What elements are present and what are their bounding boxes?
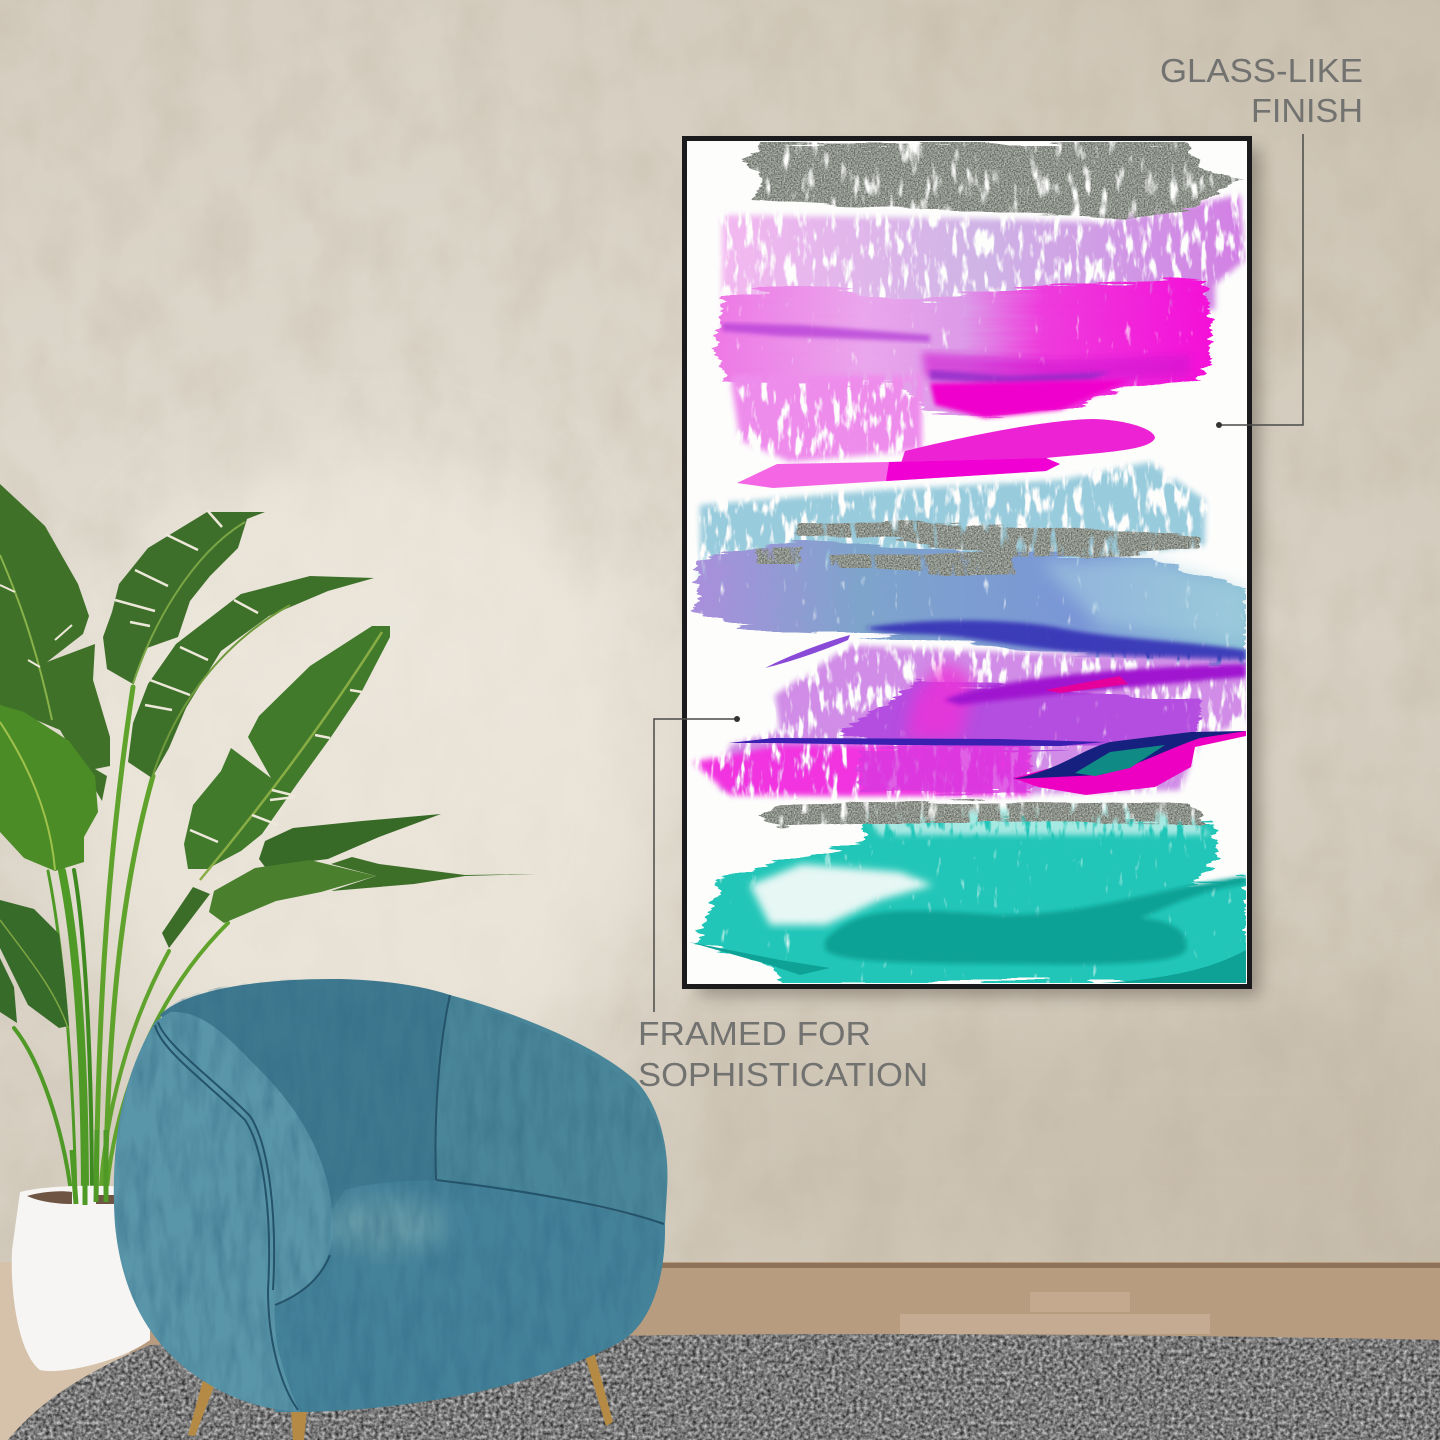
leaf: lower left of fan — [162, 887, 210, 948]
chair back right section — [435, 995, 668, 1224]
leaf: bottom left — [0, 900, 69, 1028]
magenta lower stroke — [693, 731, 1246, 796]
armchair — [114, 979, 668, 1440]
leaf: front fan blade — [209, 860, 376, 923]
pale purple wash — [722, 195, 1245, 310]
seat highlight — [325, 1200, 445, 1250]
leaf: upper fan blade — [259, 814, 441, 867]
pale magenta drips — [730, 375, 922, 462]
callout: framed for sophistication: SOPHISTICATION — [638, 1056, 928, 1093]
leader line — [1220, 134, 1303, 425]
velvet texture — [114, 979, 666, 1412]
framed painting — [684, 138, 1250, 986]
gold legs — [188, 1344, 613, 1440]
grey mid streaks — [755, 522, 1200, 575]
leaf: front broad left — [0, 705, 98, 871]
leaf: far left tall — [0, 484, 110, 801]
callout: glass-like finish — [1160, 52, 1363, 428]
leaf: upper centre — [103, 510, 265, 684]
leader line — [654, 719, 736, 1012]
wooden floor — [0, 1262, 1440, 1440]
black frame and white canvas — [684, 138, 1250, 986]
pink purple wash — [720, 645, 1246, 795]
small purple drip — [765, 635, 850, 668]
abstract brush strokes — [689, 144, 1246, 983]
chair back — [160, 979, 450, 1240]
grey shag rug — [8, 1334, 1440, 1440]
painting drop shadow — [698, 148, 1260, 996]
blue purple wash — [696, 540, 1246, 665]
plant — [0, 484, 538, 1205]
white planter pot — [12, 1130, 150, 1371]
magenta sliver strokes — [737, 419, 1155, 488]
grey lower band — [758, 801, 1207, 827]
callout label: FRAMED FOR — [638, 1015, 871, 1052]
leaf: lowest left — [0, 958, 17, 1023]
leaf: large right — [184, 626, 390, 880]
left arm — [114, 1012, 333, 1412]
plant stems — [14, 687, 228, 1205]
chair seat — [262, 1181, 665, 1412]
magenta block stroke — [716, 278, 1212, 420]
grey top strokes — [740, 144, 1244, 219]
callout label: GLASS-LIKE — [1160, 52, 1363, 89]
callout: glass-like finish: FINISH — [1251, 92, 1363, 129]
navy band — [865, 620, 1246, 662]
pale blue wash — [700, 462, 1205, 585]
callout: framed for sophistication — [638, 716, 928, 1093]
teal stroke — [689, 805, 1246, 983]
chair piping — [155, 995, 664, 1410]
leaf: long diagonal — [128, 576, 374, 778]
leaf: long fan blade — [331, 857, 538, 891]
